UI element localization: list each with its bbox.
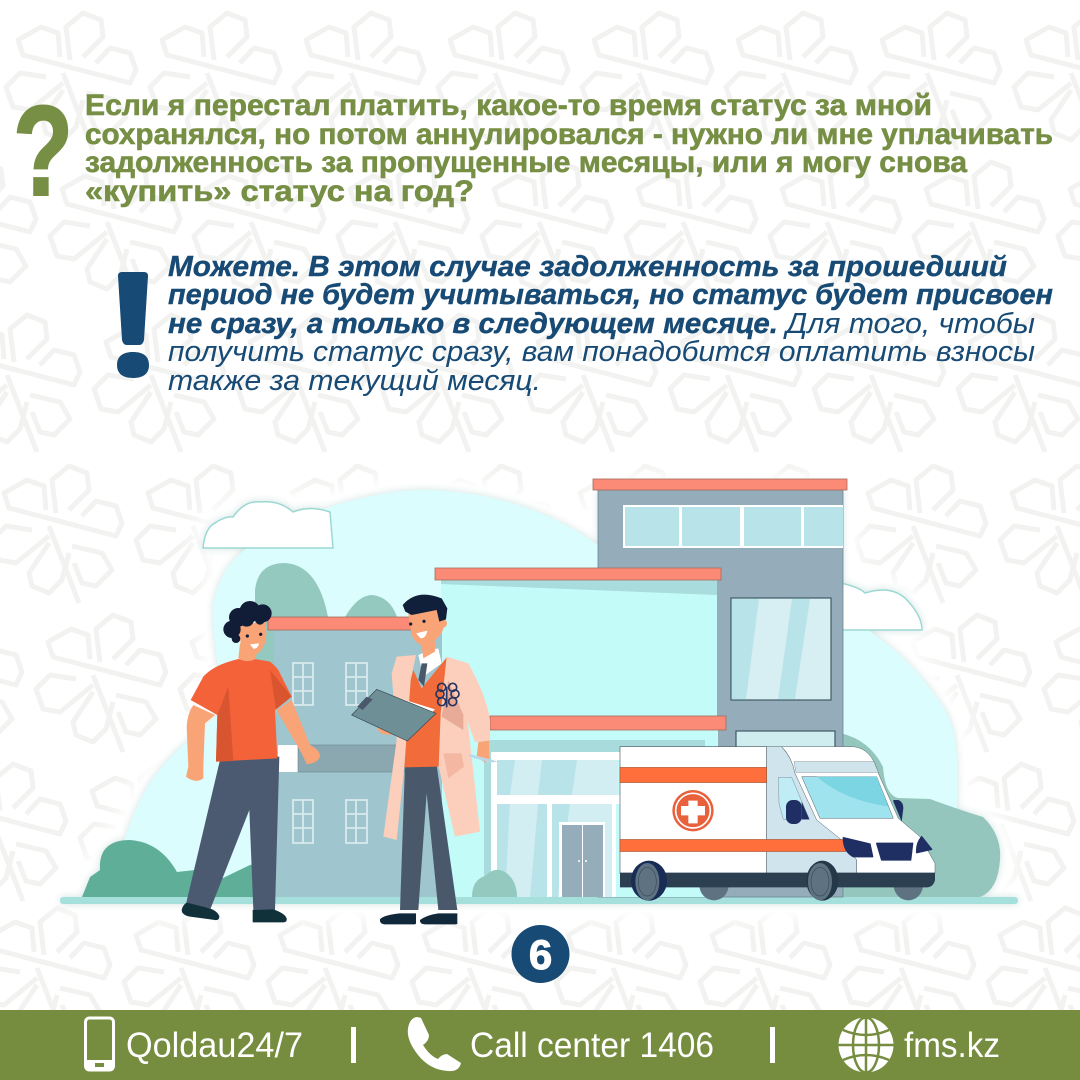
divider [351,1027,356,1063]
text: website: fms.kz [904,1026,1000,1065]
cab side [767,747,857,873]
answer text: не сразу, а только в следующем месяце. [168,308,778,340]
background silhouette with glow [60,490,1018,904]
middle roof [435,568,721,580]
person: doctor [352,595,498,924]
front wheels [631,861,838,901]
face [409,620,426,626]
window frames [491,752,620,897]
ambulance [620,747,935,901]
icon: exclamation mark [117,272,149,378]
icon: globe [838,1017,894,1073]
left building [268,617,442,897]
ear [438,619,447,628]
text: Qoldau24/7: Qoldau24/7 [126,1026,303,1065]
shirt [191,659,292,762]
answer text: получить статус сразу, вам понадобится оплатить взносы [168,336,1035,368]
stripes [620,767,846,852]
cab nose [782,747,935,873]
window strip [623,505,843,548]
head [408,608,445,646]
bush: right [840,733,1000,897]
badge [436,683,459,707]
question text: Если я перестал платить, какое-то время статус за мной [85,89,932,122]
question text: сохранялся, но потом аннулировался - нужно ли мне уплачивать [85,118,1053,151]
door [559,822,605,897]
small bush [472,870,517,897]
page number badge [512,925,570,983]
answer block [117,251,1053,397]
entrance [472,716,726,897]
question block [13,80,1053,223]
face [246,633,262,638]
question text [85,89,1053,208]
mirrors [786,800,903,824]
shoes [182,903,287,922]
trousers [400,765,457,910]
clipboard [352,689,436,741]
lower window [736,731,835,751]
footer band [0,1010,1080,1080]
answer text: период не будет учитываться, но статус будет присвоен [168,279,1053,311]
glass panels [497,760,618,897]
headlights and grille [843,837,932,860]
awning [490,716,726,730]
answer text: также за текущий месяц. [168,365,541,397]
middle building [435,568,721,897]
neck and head [238,622,266,661]
person: patient [182,601,320,922]
vest [404,657,447,767]
shoes [380,913,457,924]
answer text: Для того, чтобы [783,308,1035,340]
page number badge: 6 [529,931,552,978]
text: call center: Call center 1406 [470,1026,714,1065]
van box [620,747,767,873]
roof [593,479,847,490]
hair [223,601,272,643]
hair [403,595,447,622]
left hand [377,727,392,735]
collar and tie [418,648,442,677]
arms [186,700,320,781]
trousers [186,757,279,910]
ear [234,629,243,638]
right hand and pen [477,741,489,763]
icon: smartphone [85,1018,114,1071]
question text: задолженность за пропущенные месяцы, или я могу снова [85,146,967,179]
bush: left [82,840,275,897]
question text: «купить» статус на год? [85,175,474,208]
trees behind building [255,563,410,665]
neck [422,642,435,658]
windows [778,762,893,819]
illustration: clinic scene [60,479,1018,924]
icon: question mark: ? [13,80,73,223]
bumper [620,873,935,887]
icon: medical cross [672,790,714,831]
big window [731,598,831,700]
answer text: Можете. В этом случае задолженность за прошедший [168,251,1007,283]
answer text [168,251,1053,397]
icon: phone handset [408,1017,461,1071]
far wheels [699,870,923,900]
coat [383,655,490,840]
divider [770,1027,775,1063]
tall building [593,479,847,897]
